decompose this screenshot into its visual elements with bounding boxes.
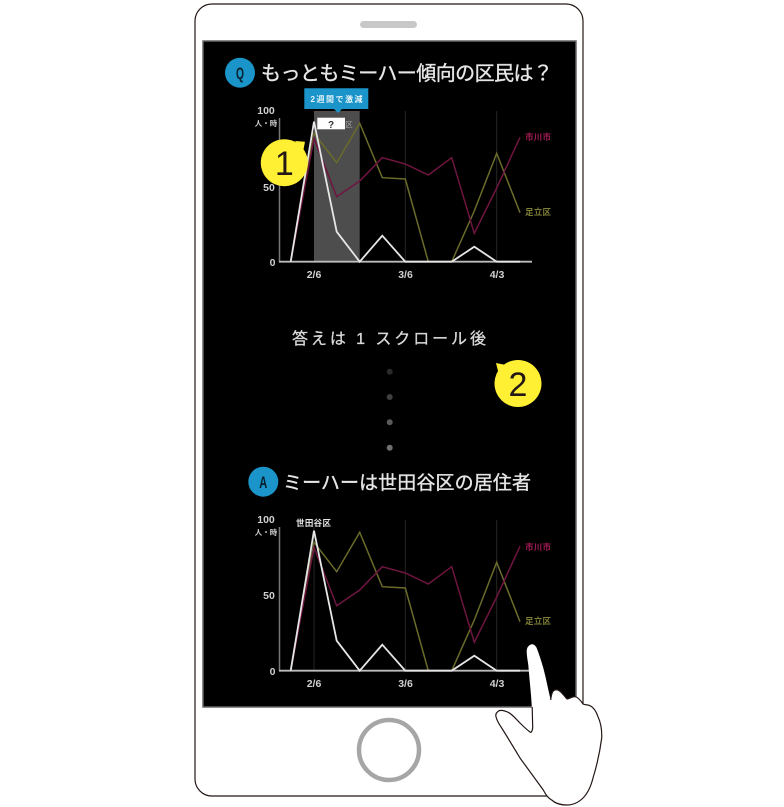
question heading [225, 58, 553, 88]
answer title: ミーハーは世田谷区の居住者 [283, 472, 531, 494]
x axis labels: 4/3 [490, 269, 504, 281]
icon: A badge: A [259, 473, 267, 492]
series: 市川市 [291, 546, 520, 671]
x axis labels [307, 269, 504, 281]
callout: two weeks [304, 88, 368, 113]
x axis labels: 3/6 [398, 678, 413, 690]
series: 足立区 [291, 532, 520, 671]
series: 世田谷区 [291, 531, 520, 671]
x axis labels [307, 678, 504, 690]
y axis labels: 50 [263, 590, 275, 602]
line chart: answer [255, 514, 551, 690]
scroll prompt: 答えは 1 スクロール後 [292, 330, 486, 348]
phone body [195, 4, 583, 796]
marker 1: 1 [275, 145, 294, 183]
icon: Q badge [225, 58, 255, 88]
scroll dots [387, 369, 393, 451]
y axis labels: 人・時 [255, 118, 278, 128]
hidden answer label [317, 118, 353, 131]
marker 1 [261, 139, 308, 186]
hidden answer label: 区 [345, 120, 353, 129]
y axis labels: 0 [270, 666, 276, 678]
highlight band [314, 111, 360, 262]
series: 世田谷区 [291, 122, 520, 262]
icon: Q badge: Q [236, 64, 244, 83]
y axis labels [255, 514, 278, 678]
icon: pointing hand [496, 644, 602, 805]
label: 足立区: 足立区 [525, 207, 551, 217]
label: 足立区: 足立区 [525, 616, 551, 626]
label: 市川市: 市川市 [525, 132, 551, 142]
y axis labels [255, 105, 278, 269]
series: 足立区 [291, 123, 520, 262]
y axis labels: 100 [257, 105, 275, 117]
x axis labels: 3/6 [398, 269, 413, 281]
phone screen [203, 41, 576, 707]
y axis labels: 0 [270, 257, 276, 269]
x axis labels: 4/3 [490, 678, 504, 690]
x axis labels: 2/6 [307, 678, 321, 690]
question title: もっともミーハー傾向の区民は？ [261, 62, 553, 85]
label: 世田谷区: 世田谷区 [296, 518, 331, 528]
y axis labels: 100 [257, 514, 275, 526]
series: 市川市 [291, 137, 520, 262]
home button [359, 720, 419, 780]
callout: two weeks: 2週間で激減 [310, 94, 362, 104]
x axis labels: 2/6 [307, 269, 321, 281]
label: 市川市: 市川市 [525, 542, 551, 552]
icon: A badge [248, 467, 278, 497]
marker 2: 2 [509, 366, 527, 404]
answer heading [248, 467, 531, 497]
hidden answer label: ? [328, 120, 334, 131]
y axis labels: 50 [263, 182, 275, 194]
marker 2 [494, 360, 542, 407]
line chart: question [255, 88, 551, 281]
y axis labels: 人・時 [255, 527, 278, 537]
